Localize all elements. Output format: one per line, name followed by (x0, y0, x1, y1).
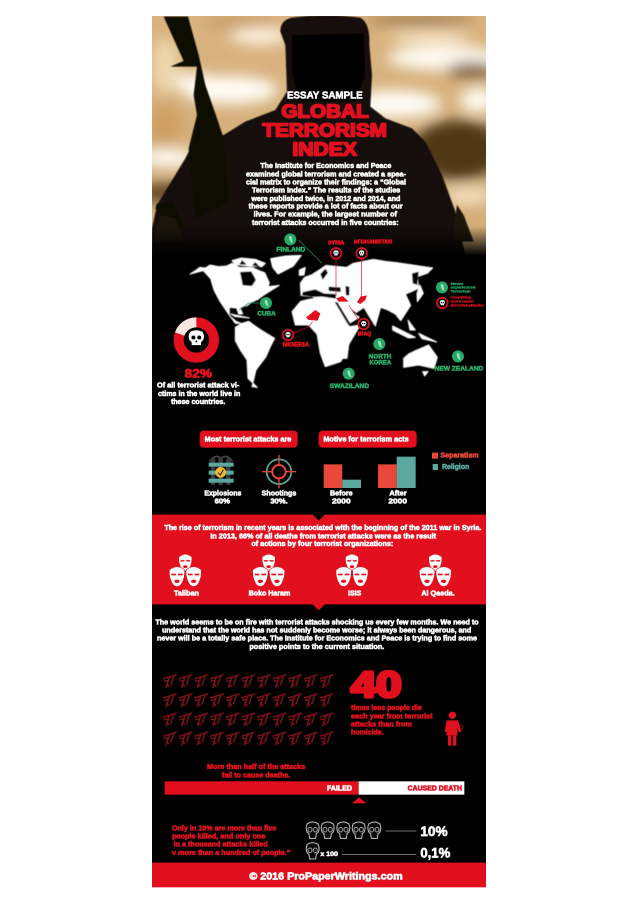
icon: dynamite with clock (209, 456, 234, 485)
marker: Syria (328, 240, 344, 259)
text block: world on fire: positive points to the current situation. (249, 642, 384, 651)
legend: map key: Never (451, 282, 464, 286)
legend: separatism and religion (432, 451, 479, 471)
title: Global Terrorism Index: TERRORISM (262, 119, 387, 140)
marker: Syria: SYRIA (328, 240, 344, 246)
marker: North Korea: KOREA (369, 360, 391, 367)
text block: victims caption: ctims in the world live in (158, 389, 241, 398)
map: continents (190, 255, 437, 387)
text block: only in 10% (172, 823, 291, 857)
button: most terrorist attacks are (200, 431, 298, 448)
label: explosions 60% (204, 488, 241, 505)
bar chart: motives before and after 2000: 2000 (388, 496, 407, 505)
icon: armed person (445, 712, 463, 746)
chart: 82 percent donut (179, 322, 214, 358)
icon: ISIS masks: ISIS (348, 588, 361, 597)
text block: only in 10%: in a thousand attacks killed (174, 840, 268, 849)
marker: Cuba (257, 297, 276, 317)
marker: New Zealand: NEW ZEALAND (435, 366, 484, 373)
text block: introduction: these reports provide a lot of facts about our (249, 202, 403, 211)
legend: separatism and religion: Religion (442, 462, 470, 471)
label: explosions 60%: Explosions (204, 488, 241, 497)
panel: failed attacks (152, 762, 486, 887)
text block: victims caption (157, 381, 241, 406)
title: Global Terrorism Index (262, 100, 387, 160)
text block: times less people die (351, 703, 433, 736)
text block: rise of terrorism: of actions by four terrorist organizations: (251, 539, 393, 548)
label: shootings 30% (262, 488, 296, 505)
text block: introduction: terrorist attacks occurred in five countries: (252, 218, 399, 227)
legend: map key (436, 281, 484, 308)
marker: Iraq: IRAQ (358, 331, 372, 337)
text block: only in 10%: v more than a hundred of people.” (172, 848, 291, 857)
icon: ISIS masks (336, 554, 368, 597)
panel: infographic background (152, 16, 486, 887)
marker: Afghanistan (354, 239, 392, 259)
heading: essay sample: ESSAY SAMPLE (287, 90, 363, 101)
panel: world map (157, 233, 484, 406)
icon: Boko Haram masks (249, 554, 291, 597)
panel: homicide comparison (155, 617, 479, 746)
stat: 40: 40 (351, 664, 402, 705)
text block: only in 10%: Only in 10% are more than five (172, 823, 276, 832)
text block: world on fire (155, 617, 479, 651)
legend: map key: more under (451, 300, 475, 304)
footer (152, 863, 486, 887)
title: Global Terrorism Index: INDEX (292, 139, 358, 160)
map: highlighted countries (306, 295, 367, 321)
text block: times less people die: each year from terrorist (351, 711, 433, 720)
panel: red band on terrorist organizations (152, 515, 486, 610)
chart: failed vs caused death bar (165, 781, 464, 795)
text block: victims caption: Of all terrorist attack vi- (157, 381, 240, 390)
text block: introduction: cial matrix to organize their findings: a “Global (246, 178, 406, 187)
title: Global Terrorism Index: GLOBAL (281, 100, 369, 121)
text block: more than half: More than half of the attacks (207, 762, 305, 771)
panel: attack types and motives (200, 431, 479, 505)
legend: map key: Countries (451, 296, 471, 300)
map: leader lines (239, 240, 362, 333)
legend: map key: terrorist attacks (451, 304, 484, 308)
text block: introduction: The Institute for Economics and Peace (260, 161, 391, 170)
label: shootings 30%: 30%. (270, 496, 288, 505)
text block: times less people die: homicide. (351, 727, 384, 736)
text block: rise of terrorism: In 2013, 66% of all deaths from terrorist attacks were as the result (210, 531, 437, 540)
legend: map key: experienced (451, 286, 475, 290)
text block: more than half: fail to cause deaths. (222, 770, 290, 779)
text block: introduction: examined global terrorism and created a spea- (246, 169, 407, 178)
icon: Boko Haram masks: Boko Haram (249, 588, 291, 597)
marker: North Korea (369, 338, 392, 367)
marker: Swaziland (330, 368, 369, 390)
marker: Finland (276, 233, 306, 254)
icon row: skull x 100, 0,1%: 0,1% (420, 844, 451, 860)
icon: Al Qaeda masks (419, 554, 455, 597)
marker: Swaziland: SWAZILAND (330, 383, 369, 390)
panel: hero photograph of fighter against sky (152, 16, 486, 255)
icon row: skull x 100, 0,1%: x 100 (320, 851, 338, 858)
button: motive for terrorism acts: Motive for terrorism acts (323, 434, 409, 443)
marker: Nigeria: NIGERIA (283, 343, 310, 349)
legend: map key: Terrorism (451, 290, 472, 294)
footer: © 2016 ProPaperWritings.com (249, 871, 403, 882)
map: seas (239, 260, 419, 325)
marker: Nigeria (283, 330, 310, 349)
stat: 82%: 82% (185, 366, 212, 380)
text block: world on fire: never will be a totally safe place. The Institute for Economics and Peace is trying to find some (157, 634, 477, 643)
chart: failed vs caused death bar: CAUSED DEATH (408, 785, 462, 792)
icon row: five skulls, 10%: 10% (420, 823, 448, 839)
text block: world on fire: The world seems to be on fire with terrorist attacks shocking us every few months. We need to (155, 617, 479, 626)
text block: only in 10%: people killed, and only one (172, 832, 265, 841)
text block: introduction: lives. For example, the largest number of (254, 210, 398, 219)
chart: failed vs caused death bar: FAILED (327, 785, 352, 792)
text block: rise of terrorism: The rise of terrorism in recent years is associated with the beginning of the 2011 war in Syria. (164, 523, 481, 532)
marker: Afghanistan: AFGHANISTAN (354, 239, 392, 245)
label: shootings 30%: Shootings (262, 488, 296, 497)
text block: introduction: were published twice, in 2012 and 2014, and (250, 194, 400, 203)
pictogram: rows of guns (163, 675, 333, 745)
text block: introduction: Terrorism Index.” The results of the studies (252, 186, 400, 195)
text block: more than half (207, 762, 305, 779)
legend: separatism and religion: Separatism (440, 451, 479, 460)
icon row: skull x 100, 0,1% (306, 843, 451, 860)
text block: times less people die: attacks than from (351, 719, 412, 728)
marker: Finland: FINLAND (276, 247, 306, 254)
text block: world on fire: understand that the world has not suddenly become worse; it always been dangerous, and (162, 626, 471, 635)
marker: North Korea: NORTH (369, 353, 392, 360)
icon: Taliban masks: Taliban (174, 588, 200, 597)
bar chart: motives before and after 2000: Before (330, 488, 353, 497)
text block: times less people die: times less people die (351, 703, 422, 712)
silhouette: fighter with rifle (152, 15, 474, 262)
text block: introduction (246, 161, 407, 227)
icon row: five skulls, 10% (306, 822, 448, 839)
bar chart: motives before and after 2000 (324, 457, 416, 505)
bar chart: motives before and after 2000: After (389, 488, 407, 497)
marker: New Zealand (435, 350, 484, 373)
text block: victims caption: these countries. (171, 397, 225, 406)
text block: rise of terrorism (164, 523, 481, 548)
icon: crosshair (262, 455, 296, 488)
marker: Iraq (358, 319, 372, 337)
label: explosions 60%: 60% (215, 496, 231, 505)
icon: Taliban masks (169, 554, 201, 597)
marker: Cuba: CUBA (257, 310, 276, 317)
button: most terrorist attacks are: Most terrorist attacks are (205, 434, 291, 443)
button: motive for terrorism acts (319, 431, 417, 448)
arrow: bar marker (352, 797, 366, 803)
bar chart: motives before and after 2000: 2000 (332, 496, 351, 505)
icon: Al Qaeda masks: Al Qaeda. (421, 588, 455, 597)
